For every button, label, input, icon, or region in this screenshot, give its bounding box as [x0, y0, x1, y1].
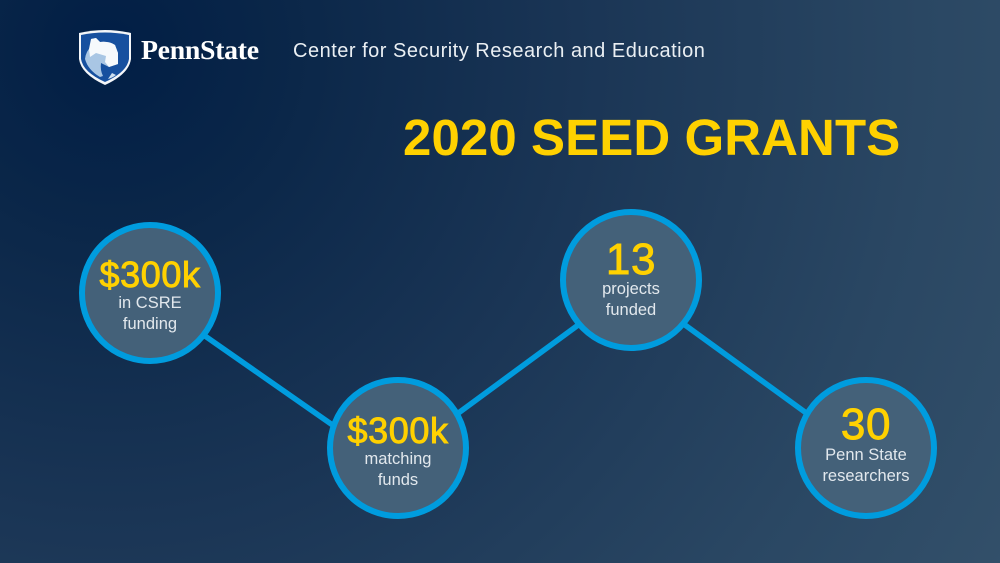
organization name: Center for Security Research and Education [293, 40, 705, 62]
label: matching [365, 450, 431, 468]
value: 30 [841, 400, 891, 449]
label [602, 280, 660, 319]
label [822, 446, 910, 485]
label [118, 294, 182, 333]
logo wordmark: PennState [141, 35, 259, 66]
logo: Penn State shield [79, 30, 131, 85]
stat circle: 13 projects funded [560, 209, 702, 351]
stat circle: 30 Penn State researchers [795, 377, 937, 519]
label: projects [602, 280, 660, 298]
title: 2020 SEED GRANTS [403, 109, 900, 166]
stat circle: $300k matching funds [327, 377, 469, 519]
value: $300k [347, 410, 449, 451]
label: in CSRE [118, 294, 182, 312]
label: funded [606, 301, 656, 319]
label: researchers [822, 467, 910, 485]
value: 13 [606, 235, 656, 284]
label: Penn State [825, 446, 907, 464]
label [365, 450, 431, 489]
label: funds [378, 471, 418, 489]
label: funding [123, 315, 177, 333]
value: $300k [99, 254, 201, 295]
stat circle: $300k CSRE funding [79, 222, 221, 364]
